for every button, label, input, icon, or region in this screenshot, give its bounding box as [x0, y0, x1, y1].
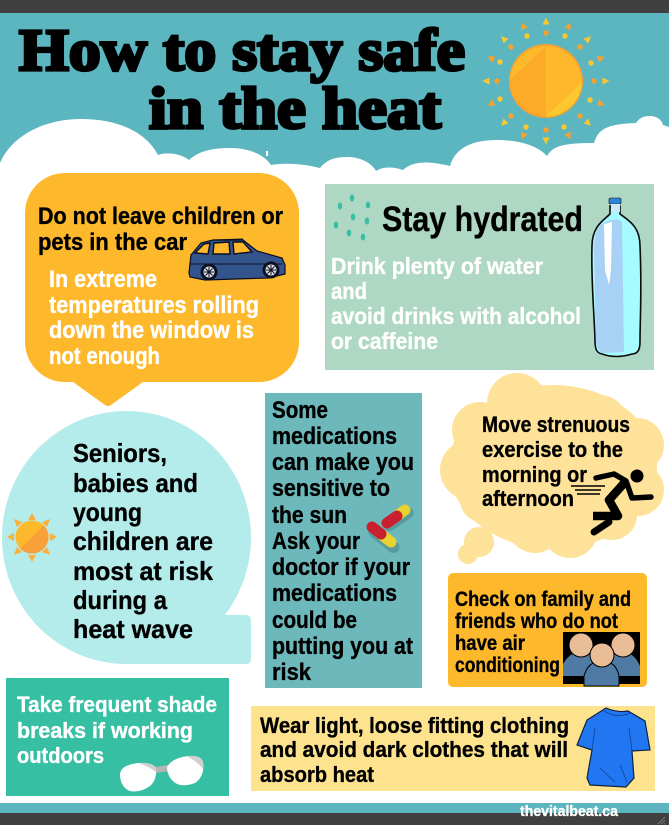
text block: exercise: Move strenuous — [482, 412, 630, 437]
text block: exercise: exercise to the — [482, 437, 623, 462]
text block: shade breaks: outdoors — [17, 743, 104, 768]
text block: medications — [272, 397, 414, 686]
text block: medications: medications — [272, 423, 397, 450]
icon: car — [189, 239, 285, 280]
title: How to stay safe — [19, 17, 465, 83]
text block: most at risk: most at risk — [73, 556, 214, 586]
icon: large sun — [482, 18, 610, 144]
text block: clothing: and avoid dark clothes that will — [260, 737, 568, 762]
panel: clothing — [251, 706, 655, 791]
text block: exercise: afternoon — [482, 486, 574, 511]
text block: medications: the sun — [272, 502, 347, 529]
text block: most at risk: during a — [73, 585, 167, 615]
text block: medications: could be — [272, 607, 357, 634]
icon: t-shirt — [577, 708, 650, 787]
text block: window warning: not enough — [49, 343, 160, 370]
title — [19, 17, 465, 141]
text block: drink water: or caffeine — [331, 328, 438, 354]
panel: shade breaks — [6, 678, 229, 796]
text block: medications: doctor if your — [272, 554, 410, 581]
text block: clothing: Wear light, loose fitting clothing — [260, 713, 569, 738]
text block: exercise — [482, 412, 630, 511]
text block: clothing: absorb heat — [260, 762, 374, 787]
text block: shade breaks: Take frequent shade — [17, 692, 217, 717]
title: in the heat — [149, 75, 441, 141]
heading: car warning — [38, 203, 283, 256]
icon: pills — [372, 510, 408, 547]
text block: shade breaks — [17, 692, 217, 768]
text block: shade breaks: breaks if working — [17, 718, 193, 743]
stray mark — [266, 151, 268, 156]
footer band — [0, 803, 669, 825]
panel: move strenuous exercise — [440, 373, 664, 564]
text block: most at risk: young — [73, 497, 142, 527]
clouds — [0, 116, 669, 200]
icon: small sun — [7, 513, 57, 562]
header band — [0, 0, 669, 173]
text block: medications: putting you at — [272, 633, 413, 660]
text block: check on family: friends who do not — [455, 610, 618, 633]
text block: most at risk — [73, 438, 214, 644]
heading: car warning: Do not leave children or — [38, 203, 283, 230]
panel: do not leave children or pets in the car — [25, 173, 299, 406]
text block: clothing — [260, 713, 569, 787]
panel: seniors, babies and young children — [2, 411, 251, 664]
text block: drink water: avoid drinks with alcohol — [331, 303, 581, 329]
panel: medications — [265, 393, 422, 688]
icon: sunglasses — [120, 756, 203, 791]
icon: runner — [571, 470, 651, 532]
footer credit: thevitalbeat.ca — [520, 803, 619, 820]
text block: medications: can make you — [272, 449, 414, 476]
text block: most at risk: Seniors, — [73, 438, 167, 468]
text block: most at risk: children are — [73, 526, 213, 556]
panel: check on family and friends — [448, 573, 647, 687]
panel: stay hydrated — [325, 184, 654, 370]
icon: water drops — [334, 194, 370, 240]
icon: people — [563, 632, 640, 686]
text block: window warning: In extreme — [49, 266, 157, 293]
text block: check on family: conditioning — [455, 654, 560, 677]
text block: most at risk: heat wave — [73, 614, 193, 644]
text block: window warning — [49, 266, 259, 370]
text block: medications: sensitive to — [272, 475, 390, 502]
text block: check on family: have air — [455, 632, 525, 655]
text block: check on family — [455, 588, 631, 677]
text block: drink water — [331, 253, 581, 354]
heading: stay hydrated: Stay hydrated — [382, 200, 583, 239]
text block: medications: Some — [272, 397, 328, 424]
text block: check on family: Check on family and — [455, 588, 631, 611]
text block: window warning: down the window is — [49, 317, 254, 344]
text block: medications: medications — [272, 580, 397, 607]
heading: car warning: pets in the car — [38, 229, 187, 256]
text block: medications: risk — [272, 659, 312, 686]
text block: exercise: morning or — [482, 462, 587, 487]
icon: water bottle — [592, 198, 641, 356]
text block: most at risk: babies and — [73, 468, 198, 498]
text block: medications: Ask your — [272, 528, 360, 555]
text block: drink water: Drink plenty of water — [331, 253, 543, 279]
text block: drink water: and — [331, 278, 367, 304]
text block: window warning: temperatures rolling — [49, 292, 259, 319]
